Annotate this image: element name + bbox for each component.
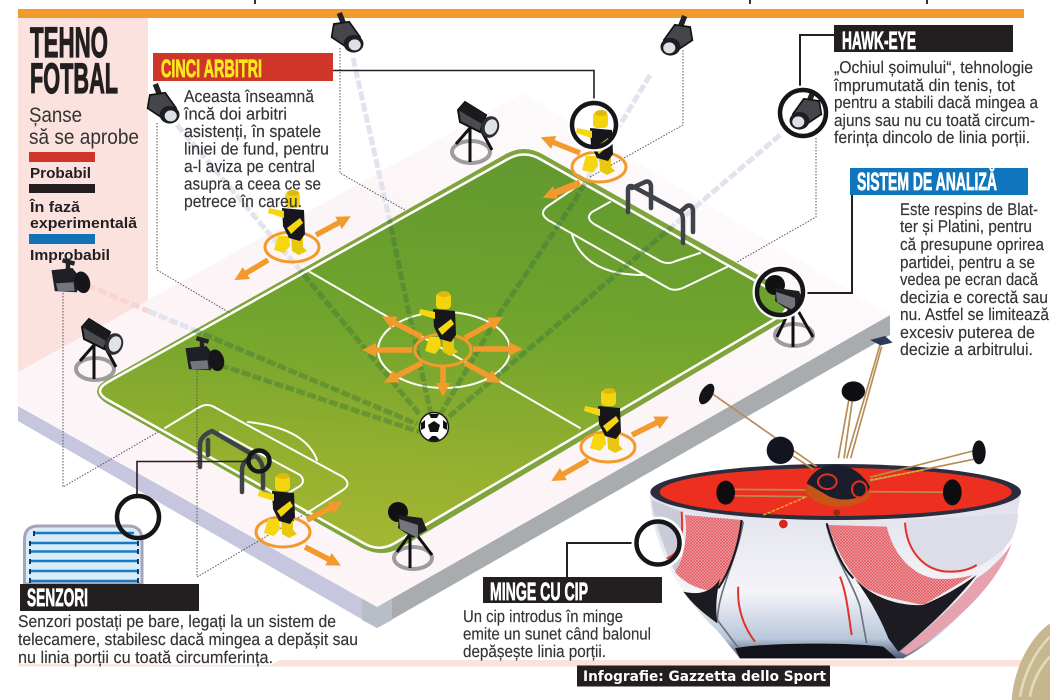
sistem de analiza text: excesiv puterea de [900,323,1035,342]
hawk-eye text: „Ochiul șoimului“, tehnologie [834,58,1033,77]
minge cu cip text: emite un sunet când balonul [463,624,651,644]
halfway line [310,272,580,428]
sistem de analiza text [900,200,1049,359]
chances subtitle: Șanse [29,104,82,127]
referee right [560,388,660,476]
sensor grid icon [24,526,142,584]
cinci arbitri text: liniei de fund, pentru [184,140,329,158]
credit: Infografie: Gazzetta dello Sport [583,669,826,685]
black panel right [848,570,977,652]
yellow dashed rods [763,470,923,515]
chances subtitle: să se aprobe [29,126,139,149]
sidebar pink panel [18,18,148,378]
sight lines over pitch [192,178,674,434]
senzori heading: SENZORI [27,584,88,612]
minge cu cip heading: MINGE CU CIP [490,578,588,606]
cinci arbitri text [183,87,329,211]
central referee with arrows [372,291,513,387]
platform [18,93,890,628]
red swirl lines [667,512,977,642]
red interior [660,468,1012,516]
legend: Improbabil [30,247,110,264]
sistem de analiza text: decizie a arbitrului. [900,340,1033,359]
referee top right [550,110,626,194]
cut-away ball with chip [650,336,1021,658]
cinci arbitri text: asistenți, în spatele [184,122,321,141]
cinci arbitri text: petrece în careu. [184,192,302,211]
senzori text: Senzori postați pe bare, legați la un sistem de [18,612,336,631]
top edge text fragments [254,0,928,4]
minge cu cip text: Un cip introdus în minge [463,607,623,626]
camera: analysis system tripod [765,275,813,347]
title [30,19,118,103]
footer pink rule [18,660,1022,666]
camera: tripod left [76,319,126,380]
pitch grass [100,154,787,548]
camera: left sidebar [52,260,93,295]
rim [650,464,1021,520]
mesh panel left [675,515,742,592]
referee left upper [243,190,342,275]
camera: tripod top [452,102,502,163]
football [420,412,448,442]
upper penalty area [543,183,727,290]
silver panel left [652,500,683,572]
silver panel right [905,513,1018,573]
black panel left [683,578,720,623]
chances subtitle [29,104,139,149]
cinci arbitri text: a-l aviza pe central [184,157,315,176]
cinci arbitri text: încă doi arbitri [183,104,287,124]
hawk-eye text: împrumutată din tenis, tot [833,76,1015,95]
hawk-eye heading: HAWK-EYE [842,27,916,55]
title: FOTBAL [30,55,118,103]
camera: next to text [148,84,180,124]
legend: Probabil [30,165,91,182]
hawk-eye text: ferința dincolo de linia porții. [834,128,1030,147]
orange top bar [18,9,1024,18]
camera: hawk-eye [790,90,821,130]
senzori text: nu linia porții cu toată circumferința. [18,648,273,667]
hawk-eye text: ajuns sau nu cu toată circum- [834,111,1035,130]
cinci arbitri heading: CINCI ARBITRI [161,55,262,83]
cinci arbitri text: asupra a ceea ce se [184,174,321,194]
black base [735,644,897,658]
dotted camera ground lines [63,48,816,577]
sistem de analiza text: ter și Platini, pentru [900,217,1032,236]
minge cu cip text: depășește linia porții. [463,642,606,661]
cinci arbitri leader and circle [333,70,619,150]
dark seams [717,522,867,650]
ball shell [650,493,1021,658]
senzori text: telecamere, stabilesc dacă mingea a depășit sau [18,630,358,649]
mesh panel right [828,525,973,605]
legend: experimentală [30,215,138,232]
camera: bottom tripod [388,502,432,569]
senzori leader and circles [117,450,270,538]
football pitch [97,149,798,553]
pitch boundary line [100,154,787,548]
camera: top right [660,16,692,56]
goal lower left [200,431,263,492]
lower penalty area [165,405,348,513]
pink panel right edge [900,543,1012,655]
small discs [696,381,718,407]
goal upper right [628,182,693,243]
minge cu cip text [463,607,651,661]
referee bottom left [256,473,334,561]
hawk-eye leader and circle [777,35,834,139]
minge cu cip leader and circle [567,518,683,577]
sistem de analiza leader and circle [754,195,852,318]
legend [29,152,138,264]
chip rods [712,345,978,497]
camera sight lines outside pitch [148,58,780,345]
cinci arbitri text: Aceasta înseamnă [184,87,314,106]
photo fragment: hair [1012,623,1050,700]
camera: on pitch [186,338,227,373]
centre circle [378,312,510,388]
senzori text [18,612,358,667]
hawk-eye text [833,58,1038,147]
sistem de analiza text: partidei, pentru a se [900,253,1035,272]
camera: top centre [332,13,364,53]
senzori heading [20,584,199,612]
chip dome [805,480,870,507]
title: TEHNO [30,19,108,67]
legend: În fază [29,198,81,216]
sight line over pink panel [87,285,148,311]
